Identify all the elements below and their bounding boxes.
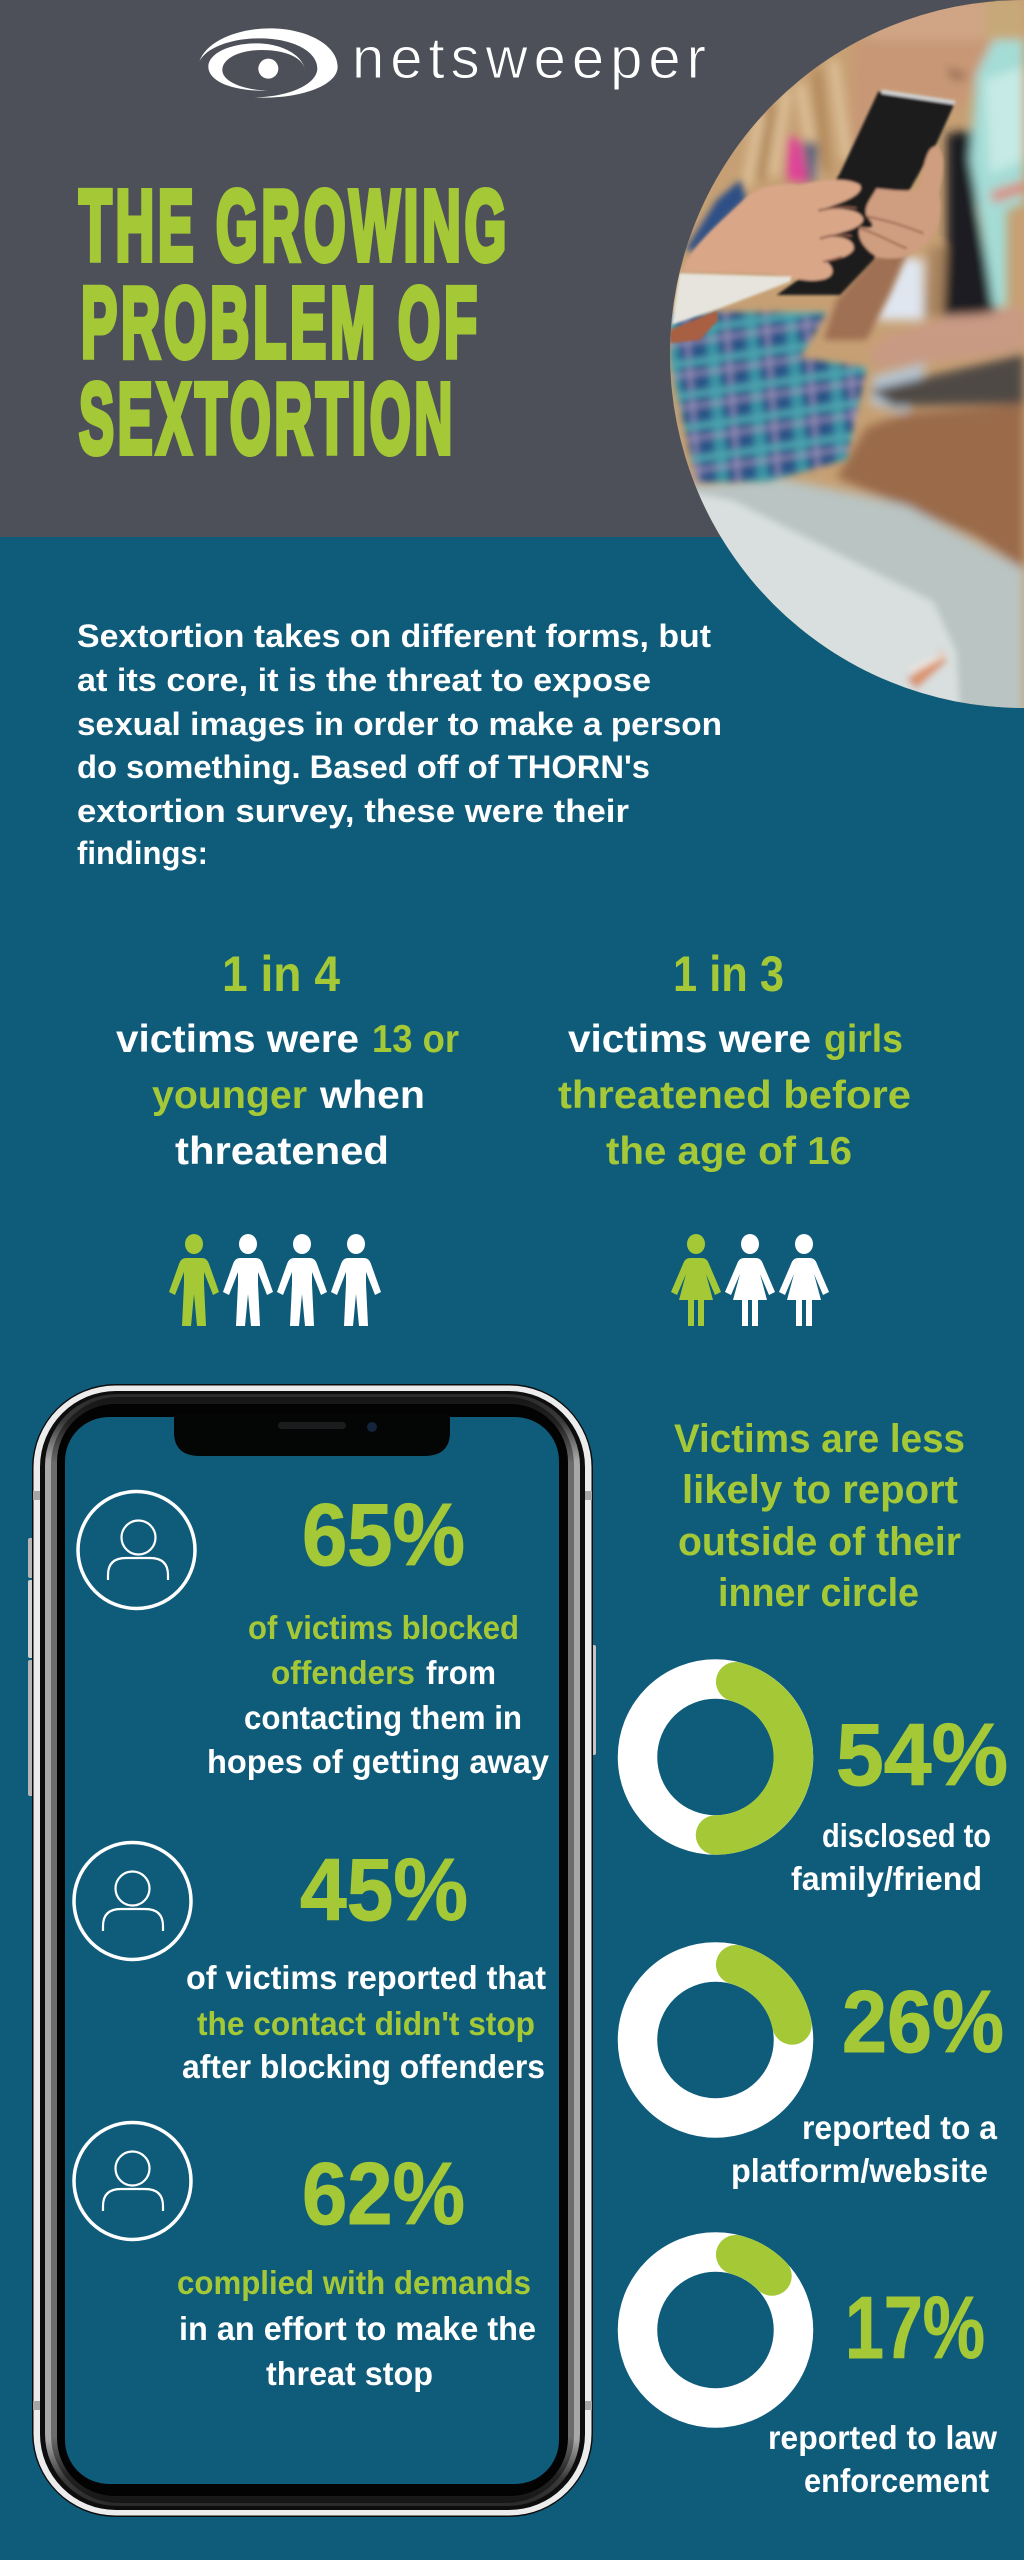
logo: netsweeper — [199, 26, 706, 98]
description: contacting them in — [244, 1699, 522, 1736]
logo wordmark: netsweeper — [352, 26, 706, 91]
heading: victims are less likely to report: likely to report — [682, 1468, 958, 1512]
stat description: girls before 16 — [558, 1018, 911, 1173]
title — [79, 170, 510, 475]
photo: teens using phones and tablets — [660, 0, 1024, 720]
description — [177, 2264, 536, 2392]
description: in an effort to make the — [179, 2310, 536, 2347]
phone stat: 65% — [78, 1485, 550, 1780]
phone stat: 62% — [74, 2122, 536, 2392]
donut stat: 26% — [638, 1962, 1004, 2189]
phone frame — [28, 1384, 596, 2517]
icon: person in circle — [78, 1492, 195, 1608]
percentage: 17%: 17% — [845, 2278, 985, 2377]
label: reported to law — [768, 2419, 997, 2456]
description: offenders — [271, 1654, 415, 1691]
stat description: girls before 16: girls — [824, 1018, 903, 1061]
label — [731, 2109, 998, 2189]
description: of victims reported that — [186, 1959, 546, 1996]
description: after blocking offenders — [182, 2048, 545, 2085]
stat: 1 in 4 victims — [116, 946, 459, 1173]
percentage: 26%: 26% — [842, 1972, 1004, 2071]
heading: victims are less likely to report: outside of their — [678, 1520, 961, 1564]
description: complied with demands — [177, 2264, 531, 2301]
description: threat stop — [266, 2355, 433, 2392]
label: family/friend — [791, 1860, 982, 1897]
percentage: 62%: 62% — [302, 2144, 465, 2243]
intro text block: sexual images in order to make a person — [77, 706, 722, 742]
stat description: 13 or younger: victims were — [116, 1018, 359, 1061]
stat description: girls before 16: the age of 16 — [606, 1130, 852, 1173]
stat number: 1 in 3: 1 in 3 — [673, 946, 784, 1002]
donut chart 54% — [638, 1679, 794, 1835]
description: hopes of getting away — [207, 1743, 550, 1780]
header band — [0, 0, 1024, 537]
intro text block: do something. Based off of THORN's — [77, 749, 650, 785]
stat description: 13 or younger: 13 or — [372, 1018, 459, 1061]
stat description: 13 or younger: threatened — [175, 1130, 389, 1173]
donut stat: 54% — [638, 1679, 1008, 1897]
donut chart 17% — [638, 2252, 794, 2408]
title: PROBLEM OF — [81, 267, 481, 379]
description — [207, 1609, 550, 1780]
stat description: 13 or younger — [116, 1018, 459, 1173]
icon: four male figures, one highlighted — [169, 1234, 381, 1326]
label: enforcement — [804, 2462, 989, 2499]
stat description: girls before 16: threatened before — [558, 1074, 911, 1117]
icon: eye mark — [199, 28, 338, 98]
phone stat: 45% — [74, 1840, 546, 2085]
percentage: 45%: 45% — [300, 1840, 468, 1939]
label: platform/website — [731, 2152, 988, 2189]
description: of victims blocked — [248, 1609, 519, 1646]
donut stat: 17% — [638, 2252, 997, 2499]
label: disclosed to — [822, 1817, 991, 1854]
stat: 1 in 3 victims — [558, 946, 911, 1173]
percentage: 54%: 54% — [836, 1705, 1008, 1804]
donut chart 26% — [638, 1962, 794, 2118]
icon: person in circle — [74, 2122, 191, 2240]
title: SEXTORTION — [79, 363, 456, 475]
title: THE GROWING — [79, 170, 510, 282]
intro text block: Sextortion takes on different forms, but — [77, 618, 711, 654]
percentage: 65%: 65% — [302, 1485, 465, 1584]
stat description: girls before 16: victims were — [568, 1018, 811, 1061]
description — [182, 1959, 546, 2085]
intro text block: findings: — [77, 835, 208, 871]
intro text block — [77, 618, 722, 871]
label — [768, 2419, 997, 2499]
stat description: 13 or younger: younger — [152, 1074, 307, 1117]
intro text block: extortion survey, these were their — [77, 793, 629, 829]
stat number: 1 in 4: 1 in 4 — [222, 946, 340, 1002]
heading: victims are less likely to report: Victims are less — [674, 1417, 965, 1461]
intro text block: at its core, it is the threat to expose — [77, 662, 651, 698]
label — [791, 1817, 991, 1897]
phone notch — [174, 1414, 450, 1456]
icon: three female figures, one highlighted — [671, 1234, 829, 1326]
heading: victims are less likely to report — [674, 1417, 965, 1615]
phone screen — [65, 1417, 559, 2484]
heading: victims are less likely to report: inner circle — [718, 1571, 919, 1615]
stat description: 13 or younger: when — [319, 1074, 425, 1117]
description: the contact didn't stop — [197, 2005, 535, 2042]
description: from — [426, 1654, 496, 1691]
icon: person in circle — [74, 1842, 191, 1960]
label: reported to a — [802, 2109, 998, 2146]
